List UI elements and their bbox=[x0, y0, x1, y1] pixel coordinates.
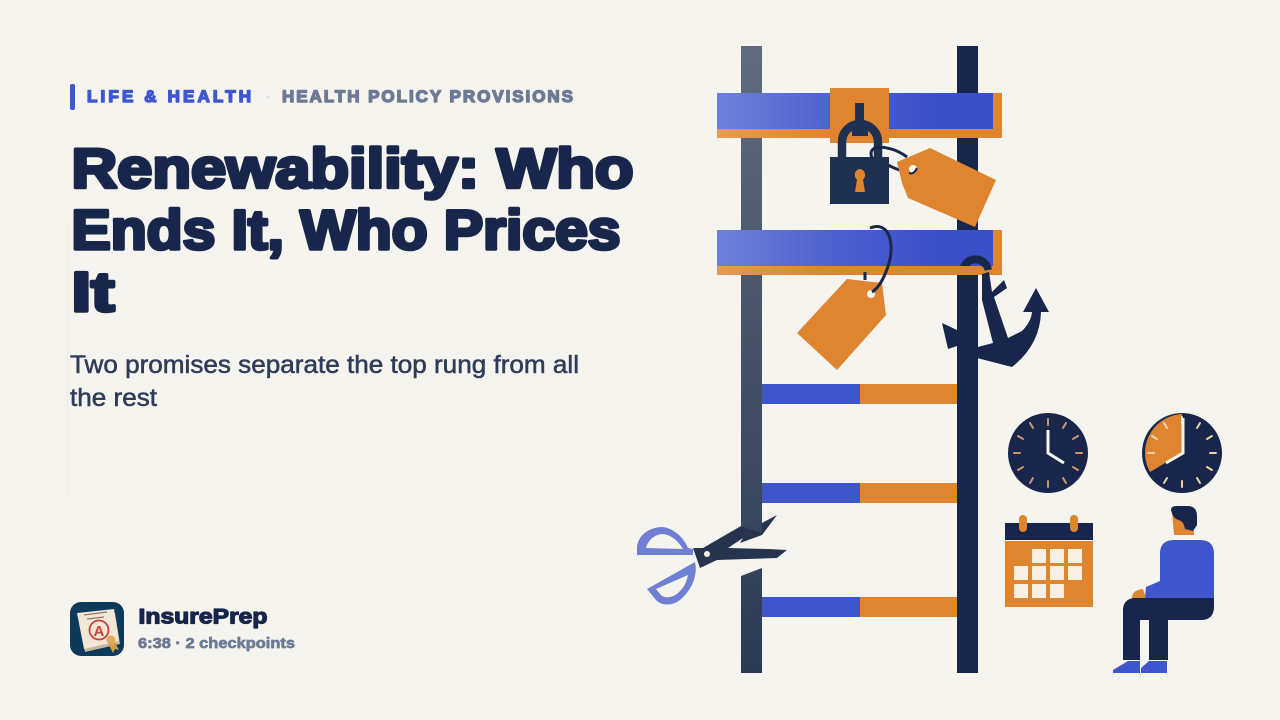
lower rung 2 bbox=[762, 483, 957, 503]
eyebrow: subject: LIFE & HEALTH bbox=[87, 87, 251, 106]
icon: scissors bbox=[637, 515, 787, 604]
subtitle bbox=[70, 351, 579, 412]
icon: seated person bbox=[1113, 506, 1214, 673]
right rail bbox=[957, 46, 978, 673]
title: Renewability: Who bbox=[72, 136, 634, 200]
second rung bbox=[717, 230, 1002, 275]
icon: anchor bbox=[717, 259, 1049, 367]
subtitle: the rest bbox=[70, 384, 157, 412]
lower rung 3 bbox=[762, 597, 957, 617]
lower rung 1 bbox=[762, 384, 957, 404]
icon: price tag lower bbox=[797, 227, 891, 370]
app logo bbox=[70, 602, 124, 656]
icon: price tag upper bbox=[897, 148, 996, 227]
eyebrow: topic: HEALTH POLICY PROVISIONS bbox=[282, 87, 573, 106]
subtitle: Two promises separate the top rung from all bbox=[70, 351, 579, 379]
icon: clock full bbox=[1008, 413, 1088, 493]
eyebrow accent bar bbox=[70, 84, 75, 110]
top rung bbox=[717, 93, 1002, 138]
icon: calendar bbox=[1005, 515, 1093, 607]
illustration: ladder bbox=[717, 46, 1002, 673]
title: It bbox=[72, 260, 114, 323]
app logo: A bbox=[94, 623, 104, 640]
icon: clock with orange sector bbox=[1142, 413, 1222, 493]
title bbox=[72, 136, 634, 323]
eyebrow: separator dot bbox=[266, 96, 270, 98]
title: Ends It, Who Prices bbox=[72, 198, 620, 261]
brand name: InsurePrep bbox=[138, 606, 268, 628]
left rail bbox=[741, 46, 762, 673]
icon: padlock bbox=[830, 88, 913, 204]
duration and checkpoints: 6:38 · 2 checkpoints bbox=[138, 635, 295, 652]
